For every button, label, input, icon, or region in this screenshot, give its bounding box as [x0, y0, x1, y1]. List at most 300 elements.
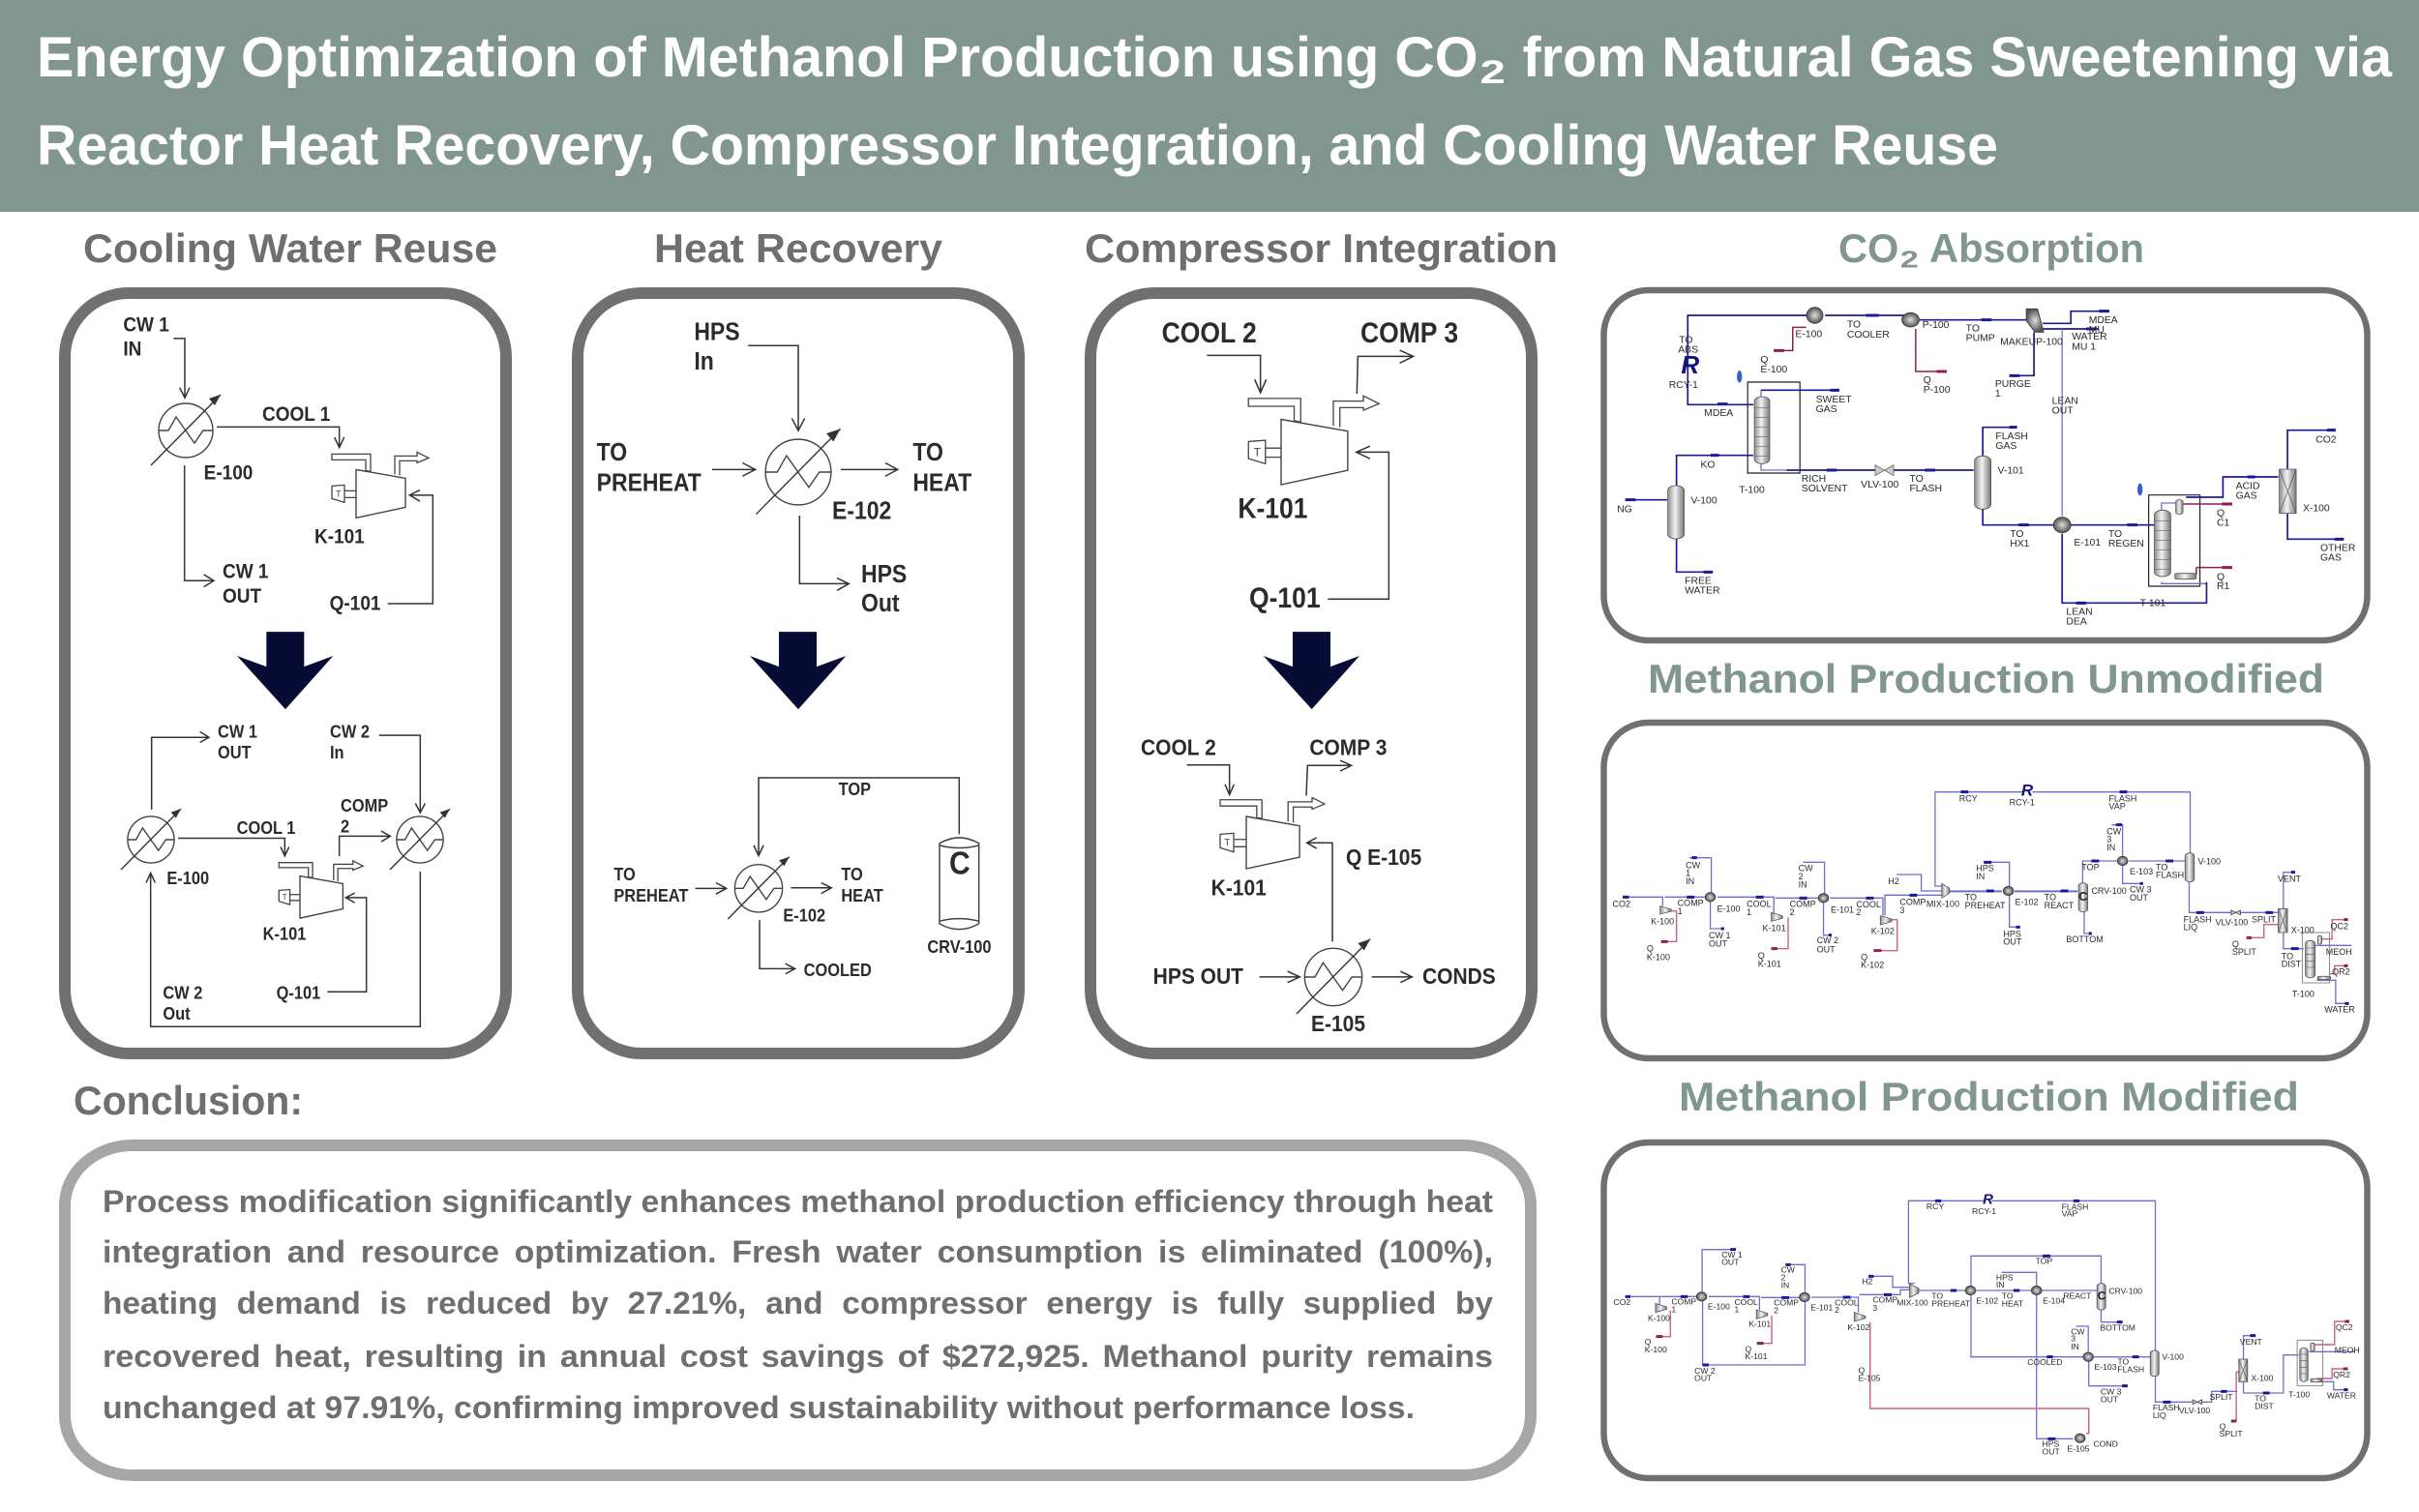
labels: unmodified flowsheet: VLV-100: [2215, 918, 2248, 928]
labels: CO2 absorption: C1: [2217, 518, 2230, 528]
labels: unmodified flowsheet: V-100: [2197, 856, 2221, 866]
labels: heat recovery: [597, 318, 992, 980]
labels: unmodified flowsheet: TOP: [2081, 862, 2100, 872]
labels: unmodified flowsheet: K-102: [1871, 927, 1895, 936]
labels: unmodified flowsheet: Q: [2232, 939, 2239, 949]
labels: CO2 absorption: HX1: [2010, 539, 2030, 549]
labels: cooling water reuse: K-101: [263, 923, 307, 943]
labels: modified flowsheet: TO: [1931, 1291, 1943, 1301]
icon: heat exchanger E-101 modified: [390, 809, 450, 870]
labels: CO2 absorption: Q: [1760, 355, 1769, 366]
labels: unmodified flowsheet: BOTTOM: [2066, 934, 2104, 944]
labels: unmodified flowsheet: COMP: [1678, 899, 1704, 908]
labels: unmodified flowsheet: IN: [1686, 876, 1694, 886]
labels: unmodified flowsheet: OUT: [2130, 893, 2149, 903]
panel: heat recovery: [578, 293, 1019, 1053]
labels: heat recovery: HEAT: [912, 470, 971, 497]
labels: cooling water reuse: Q-101: [277, 983, 321, 1003]
conclusion text: Process modification significantly enhances methanol production efficiency through heat: [103, 1184, 1493, 1219]
labels: CO2 absorption: LEAN: [2052, 397, 2078, 407]
labels: modified flowsheet: FLASH: [2153, 1403, 2180, 1412]
labels: unmodified flowsheet: K-100: [1651, 917, 1674, 927]
labels: unmodified flowsheet: Q: [1758, 951, 1765, 961]
labels: CO2 absorption: P-100: [1924, 385, 1951, 396]
icon: heat exchanger E-102 modified: [728, 857, 790, 919]
labels: unmodified flowsheet: 3: [2106, 835, 2111, 845]
labels: modified flowsheet: 1: [1671, 1305, 1676, 1315]
labels: unmodified flowsheet: E-102: [2015, 898, 2039, 907]
icon: compressor K-101 base: [332, 452, 429, 518]
labels: unmodified flowsheet: 1: [1686, 869, 1690, 878]
labels: heat recovery: PREHEAT: [613, 885, 689, 905]
labels: cooling water reuse: [123, 314, 388, 1023]
labels: unmodified flowsheet: MEOH: [2326, 947, 2352, 957]
labels: unmodified flowsheet: CW 3: [2130, 884, 2152, 894]
header banner: [0, 0, 2419, 212]
panel: CO2 absorption flowsheet: [1604, 290, 2367, 640]
labels: modified flowsheet: 2: [1781, 1272, 1786, 1282]
labels: unmodified flowsheet: IN: [1976, 872, 1985, 881]
labels: modified flowsheet: E-102: [1976, 1296, 1998, 1306]
labels: modified flowsheet: Q: [1645, 1337, 1652, 1347]
labels: modified flowsheet: K-101: [1748, 1319, 1771, 1329]
heading: Cooling Water Reuse: Cooling Water Reuse: [83, 225, 497, 271]
panel: cooling water reuse: [65, 293, 506, 1053]
labels: CO2 absorption: T-100: [1739, 485, 1765, 495]
labels: CO2 absorption: MU: [2089, 325, 2105, 336]
labels: modified flowsheet: MEOH: [2335, 1346, 2360, 1355]
arrow: base to modified: [750, 632, 846, 709]
panel frame: [578, 293, 1019, 1053]
heading: Conclusion: Conclusion:: [74, 1078, 303, 1123]
labels: modified flowsheet: CW 1: [1721, 1250, 1743, 1260]
title: ₂: [1478, 22, 1508, 96]
icon: compressor K-101 modified: [1220, 798, 1325, 869]
labels: unmodified flowsheet: 2: [1799, 872, 1804, 881]
labels: CO2 absorption: P-100: [1923, 320, 1950, 331]
labels: unmodified flowsheet: VENT: [2278, 874, 2302, 883]
heading: CO2 Absorption: ₂: [1898, 224, 1920, 277]
labels: modified flowsheet: TO: [2002, 1291, 2014, 1301]
labels: unmodified flowsheet: 1: [1747, 907, 1751, 917]
labels: CO2 absorption: Q: [2217, 572, 2225, 582]
labels: CO2 absorption: Q: [2217, 508, 2225, 519]
labels: unmodified flowsheet: VAP: [2108, 802, 2126, 812]
labels: CO2 absorption: T-101: [2140, 599, 2165, 609]
labels: unmodified flowsheet: 2: [1856, 907, 1861, 917]
labels: unmodified flowsheet: IN: [1799, 880, 1807, 890]
labels: cooling water reuse: Out: [163, 1003, 191, 1023]
icon: compressor K-101 base: T: [336, 489, 342, 498]
conclusion text: heating demand is reduced by 27.21%, and compressor energy is fully supplied by: [103, 1286, 1493, 1320]
labels: heat recovery: C: [949, 845, 971, 881]
labels: CO2 absorption: E-100: [1795, 329, 1822, 340]
labels: unmodified flowsheet: C: [2078, 889, 2088, 904]
labels: modified flowsheet: QC2: [2336, 1322, 2353, 1332]
labels: unmodified flowsheet: IN: [2106, 843, 2115, 852]
labels: modified flowsheet: K-101: [1746, 1351, 1768, 1361]
labels: CO2 absorption: MDEA: [2089, 315, 2118, 326]
labels: modified flowsheet: Q: [1859, 1365, 1866, 1375]
labels: compressor integration: CONDS: [1422, 964, 1496, 989]
labels: unmodified flowsheet: [1612, 782, 2355, 1015]
labels: unmodified flowsheet: X-100: [2291, 925, 2314, 934]
labels: CO2 absorption: FLASH: [1909, 484, 1942, 494]
labels: CO2 absorption: MU 1: [2072, 342, 2096, 353]
labels: CO2 absorption: GAS: [1816, 404, 1837, 415]
labels: modified flowsheet: CW 2: [1694, 1366, 1716, 1376]
labels: unmodified flowsheet: PREHEAT: [1965, 901, 2006, 910]
labels: unmodified flowsheet: CW: [2106, 826, 2122, 836]
panel frame: [65, 293, 506, 1053]
labels: cooling water reuse: CW 1: [218, 722, 257, 742]
labels: heat recovery: TO: [613, 864, 636, 884]
labels: CO2 absorption: RCY-1: [1669, 380, 1698, 391]
labels: CO2 absorption: DEA: [2066, 617, 2087, 628]
labels: modified flowsheet: RCY-1: [1972, 1206, 1996, 1216]
heading: Methanol Production Unmodified: Methanol Production Unmodified: [1648, 656, 2324, 701]
labels: unmodified flowsheet: REACT: [2045, 901, 2075, 910]
labels: cooling water reuse: COMP: [341, 795, 388, 815]
labels: unmodified flowsheet: COOL: [1856, 900, 1881, 909]
labels: modified flowsheet: IN: [2071, 1342, 2079, 1351]
icon: compressor K-101 modified: [279, 861, 363, 918]
labels: CO2 absorption: TO: [1679, 335, 1693, 345]
labels: compressor integration: E-105: [1311, 1011, 1365, 1036]
labels: CO2 absorption: VLV-100: [1861, 480, 1898, 490]
labels: unmodified flowsheet: OUT: [1709, 939, 1727, 949]
labels: modified flowsheet: COOLED: [2027, 1357, 2063, 1367]
labels: modified flowsheet: COMP: [1774, 1298, 1799, 1308]
labels: cooling water reuse: COOL 1: [262, 403, 330, 426]
labels: compressor integration: Q-101: [1249, 581, 1321, 613]
labels: unmodified flowsheet: RCY: [1959, 793, 1978, 803]
panel frame: [1090, 293, 1532, 1053]
labels: unmodified flowsheet: QC2: [2331, 922, 2348, 932]
labels: cooling water reuse: CW 1: [123, 314, 169, 337]
labels: unmodified flowsheet: 2: [1790, 907, 1795, 917]
labels: heat recovery: TOP: [839, 779, 871, 799]
panel: conclusion: [65, 1145, 1531, 1475]
labels: heat recovery: E-102: [832, 498, 891, 525]
labels: unmodified flowsheet: TO: [2282, 951, 2293, 961]
labels: modified flowsheet: Q: [1746, 1344, 1752, 1353]
labels: modified flowsheet: TOP: [2036, 1257, 2052, 1266]
labels: modified flowsheet: H2: [1862, 1277, 1872, 1287]
conclusion text: unchanged at 97.91%, confirming improved sustainability without performance loss.: [103, 1390, 1415, 1425]
labels: unmodified flowsheet: E-100: [1717, 904, 1740, 913]
labels: CO2 absorption: REGEN: [2108, 539, 2144, 549]
labels: unmodified flowsheet: K-100: [1647, 952, 1670, 962]
labels: modified flowsheet: E-105: [2067, 1444, 2090, 1454]
labels: compressor integration: COOL 2: [1141, 735, 1216, 760]
labels: modified flowsheet: FLASH: [2062, 1201, 2088, 1211]
labels: unmodified flowsheet: E-101: [1831, 904, 1854, 914]
heading: CO2 Absorption: Absorption: [1920, 225, 2144, 271]
labels: CO2 absorption: GAS: [2320, 552, 2342, 563]
title: [37, 22, 2393, 177]
icon: compressor K-101 modified: T: [283, 893, 287, 902]
labels: unmodified flowsheet: SPLIT: [2252, 914, 2277, 924]
labels: CO2 absorption: E-100: [1760, 365, 1787, 375]
labels: unmodified flowsheet: COOL: [1747, 899, 1772, 908]
labels: modified flowsheet: HPS: [1996, 1272, 2014, 1282]
labels: heat recovery: In: [694, 348, 714, 375]
labels: CO2 absorption: RICH: [1802, 474, 1826, 485]
heading: Compressor Integration: Compressor Integration: [1085, 225, 1558, 271]
flowsheet drawing: [1626, 1201, 2355, 1442]
labels: modified flowsheet: E-101: [1810, 1302, 1833, 1312]
panel: methanol production unmodified flowsheet: [1604, 723, 2367, 1058]
labels: CO2 absorption: COOLER: [1847, 330, 1890, 341]
labels: modified flowsheet: CRV-100: [2108, 1286, 2142, 1295]
labels: CO2 absorption: MDEA: [1704, 408, 1733, 419]
labels: heat recovery: TO: [912, 439, 943, 466]
labels: modified flowsheet: CW: [2071, 1326, 2085, 1336]
labels: unmodified flowsheet: QR2: [2332, 967, 2350, 977]
labels: CO2 absorption: V-100: [1690, 496, 1717, 507]
labels: CO2 absorption: X-100: [2303, 504, 2330, 515]
labels: modified flowsheet: Q: [2220, 1421, 2226, 1431]
labels: unmodified flowsheet: RCY-1: [2010, 798, 2035, 808]
labels: unmodified flowsheet: HPS: [1976, 864, 1994, 874]
labels: modified flowsheet: K-100: [1648, 1313, 1670, 1322]
labels: unmodified flowsheet: COMP: [1899, 898, 1926, 907]
labels: unmodified flowsheet: FLASH: [2184, 914, 2212, 924]
labels: modified flowsheet: COOL: [1835, 1297, 1859, 1307]
labels: unmodified flowsheet: CW 2: [1817, 935, 1838, 945]
panel frame: [1604, 1142, 2367, 1478]
labels: CO2 absorption: TO: [2108, 529, 2122, 540]
labels: modified flowsheet: SPLIT: [2210, 1392, 2233, 1402]
labels: modified flowsheet: OUT: [1721, 1258, 1740, 1267]
flowsheet drawing: [1626, 308, 2344, 603]
panel: methanol production modified flowsheet: [1604, 1142, 2367, 1478]
icon: heat exchanger E-100 modified: [121, 809, 181, 870]
labels: modified flowsheet: BOTTOM: [2100, 1322, 2135, 1332]
conclusion text: integration and resource optimization. Fresh water consumption is eliminated (100%),: [103, 1234, 1493, 1269]
labels: unmodified flowsheet: MIX-100: [1926, 900, 1959, 909]
labels: unmodified flowsheet: COMP: [1790, 899, 1816, 908]
labels: modified flowsheet: SPLIT: [2220, 1429, 2243, 1438]
labels: modified flowsheet: 2: [1835, 1305, 1839, 1315]
labels: modified flowsheet: REACT: [2063, 1291, 2092, 1301]
labels: heat recovery: TO: [841, 864, 863, 884]
labels: unmodified flowsheet: FLASH: [2156, 871, 2184, 880]
icon: compressor K-101 base: [1248, 396, 1379, 485]
labels: heat recovery: PREHEAT: [597, 470, 702, 497]
labels: cooling water reuse: 2: [341, 816, 349, 837]
labels: modified flowsheet: 1: [1734, 1305, 1739, 1315]
heading: CO2 Absorption: CO: [1838, 225, 1899, 271]
icon: heat exchanger E-105: [1297, 939, 1370, 1014]
labels: CO2 absorption: TO: [1847, 319, 1861, 330]
labels: CO2 absorption: ACID: [2236, 482, 2259, 492]
labels: modified flowsheet: 2: [1774, 1306, 1778, 1316]
labels: modified flowsheet: MIX-100: [1896, 1297, 1928, 1307]
labels: unmodified flowsheet: TO: [2156, 862, 2167, 872]
labels: modified flowsheet: OUT: [2043, 1446, 2060, 1456]
labels: modified flowsheet: VAP: [2062, 1209, 2077, 1219]
labels: CO2 absorption: WATER: [2072, 332, 2107, 342]
labels: CO2 absorption: E-101: [2074, 538, 2101, 548]
labels: CO2 absorption: GAS: [1995, 441, 2016, 452]
stream lines and vessel CRV-100: [696, 345, 979, 974]
icon: compressor K-101 base: T: [1254, 445, 1262, 459]
labels: unmodified flowsheet: SPLIT: [2232, 947, 2256, 957]
labels: modified flowsheet: LIQ: [2153, 1410, 2166, 1420]
labels: heat recovery: HPS: [861, 561, 907, 588]
labels: modified flowsheet: COND: [2093, 1439, 2118, 1449]
labels: unmodified flowsheet: CW: [1686, 860, 1701, 870]
labels: modified flowsheet: V-100: [2162, 1352, 2184, 1362]
labels: unmodified flowsheet: CRV-100: [2091, 886, 2127, 896]
stream lines: [1187, 350, 1414, 983]
labels: heat recovery: TO: [597, 439, 627, 466]
labels: unmodified flowsheet: WATER: [2324, 1005, 2355, 1015]
conclusion frame: [65, 1145, 1531, 1475]
labels: cooling water reuse: COOL 1: [237, 817, 296, 838]
title: from Natural Gas Sweetening via: [1508, 26, 2393, 89]
labels: modified flowsheet: IN: [1996, 1280, 2005, 1290]
labels: modified flowsheet: WATER: [2327, 1391, 2356, 1401]
labels: CO2 absorption: WATER: [1685, 586, 1720, 597]
labels: unmodified flowsheet: OUT: [1817, 944, 1836, 954]
labels: CO2 absorption: TO: [2010, 529, 2023, 540]
labels: CO2 absorption: PURGE: [1995, 379, 2031, 390]
labels: modified flowsheet: CW: [1781, 1265, 1796, 1275]
labels: cooling water reuse: CW 2: [330, 722, 370, 742]
heading: Methanol Production Modified: Methanol Production Modified: [1679, 1074, 2299, 1119]
labels: modified flowsheet: RCY: [1926, 1201, 1944, 1211]
labels: unmodified flowsheet: 1: [1678, 906, 1683, 916]
labels: cooling water reuse: E-100: [204, 462, 253, 485]
labels: cooling water reuse: K-101: [314, 526, 365, 548]
panel frame: [1604, 290, 2367, 640]
labels: modified flowsheet: FLASH: [2117, 1365, 2144, 1375]
labels: cooling water reuse: IN: [123, 338, 141, 361]
labels: unmodified flowsheet: CW: [1799, 864, 1813, 874]
labels: modified flowsheet: X-100: [2252, 1373, 2274, 1382]
labels: unmodified flowsheet: TO: [2045, 893, 2056, 903]
labels: CO2 absorption: GAS: [2236, 491, 2257, 502]
labels: compressor integration: K-101: [1238, 492, 1307, 524]
labels: CO2 absorption: PUMP: [1966, 334, 1995, 344]
labels: modified flowsheet: VENT: [2240, 1337, 2263, 1347]
labels: unmodified flowsheet: TO: [1965, 893, 1977, 903]
panel: compressor integration: [1090, 293, 1532, 1053]
labels: modified flowsheet: VLV-100: [2179, 1406, 2210, 1415]
labels: modified flowsheet: E-100: [1708, 1301, 1730, 1311]
labels: unmodified flowsheet: R: [2021, 782, 2034, 800]
labels: modified flowsheet: R: [1983, 1192, 1993, 1208]
labels: cooling water reuse: CW 1: [223, 561, 268, 583]
labels: modified flowsheet: 3: [1872, 1303, 1877, 1313]
labels: heat recovery: E-102: [783, 905, 825, 926]
labels: modified flowsheet: OUT: [2101, 1394, 2119, 1404]
labels: CO2 absorption: R1: [2217, 581, 2230, 592]
labels: CO2 absorption: OUT: [2052, 406, 2074, 417]
labels: unmodified flowsheet: FLASH: [2108, 793, 2136, 803]
labels: cooling water reuse: Q-101: [330, 593, 380, 615]
labels: CO2 absorption: TO: [1966, 324, 1980, 335]
labels: modified flowsheet: E-103: [2095, 1362, 2117, 1372]
labels: cooling water reuse: E-100: [166, 868, 209, 888]
labels: CO2 absorption: FLASH: [1995, 431, 2028, 442]
labels: modified flowsheet: CW 3: [2101, 1387, 2122, 1397]
labels: modified flowsheet: TO: [2255, 1394, 2266, 1404]
labels: unmodified flowsheet: Q: [1647, 943, 1654, 953]
icon: compressor K-101 modified: T: [1224, 838, 1230, 848]
labels: CO2 absorption: Q: [1924, 375, 1931, 386]
icon: heat exchanger E-102 base: [756, 429, 841, 515]
labels: modified flowsheet: E-105: [1859, 1373, 1881, 1382]
labels: modified flowsheet: QR2: [2333, 1370, 2350, 1379]
labels: unmodified flowsheet: K-102: [1861, 961, 1884, 970]
labels: modified flowsheet: T-100: [2288, 1390, 2310, 1400]
labels: modified flowsheet: HPS: [2043, 1439, 2059, 1449]
labels: heat recovery: COOLED: [804, 960, 872, 980]
labels: CO2 absorption: ABS: [1678, 344, 1698, 355]
labels: modified flowsheet: CO2: [1614, 1297, 1630, 1307]
labels: CO2 absorption: KO: [1701, 460, 1716, 470]
labels: heat recovery: HEAT: [841, 885, 883, 905]
labels: compressor integration: COMP 3: [1309, 735, 1387, 760]
labels: cooling water reuse: In: [330, 742, 344, 762]
labels: modified flowsheet: C: [2098, 1289, 2106, 1302]
labels: unmodified flowsheet: DIST: [2282, 960, 2302, 969]
labels: CO2 absorption: OTHER: [2320, 543, 2356, 553]
labels: unmodified flowsheet: 3: [1899, 905, 1904, 915]
flowsheet drawing: [1623, 792, 2351, 1003]
labels: heat recovery: HPS: [694, 318, 740, 346]
labels: CO2 absorption: 1: [1995, 389, 2001, 400]
title: Energy Optimization of Methanol Production using CO: [37, 26, 1490, 89]
labels: CO2 absorption: CO2: [2315, 434, 2337, 445]
labels: CO2 absorption: FREE: [1685, 577, 1712, 587]
labels: unmodified flowsheet: OUT: [2003, 937, 2022, 947]
labels: unmodified flowsheet: HPS: [2003, 929, 2021, 938]
labels: compressor integration: HPS OUT: [1153, 964, 1243, 989]
labels: CO2 absorption: LEAN: [2066, 608, 2093, 618]
labels: CO2 absorption: SWEET: [1816, 395, 1852, 405]
arrow: base to modified: [237, 632, 333, 709]
labels: cooling water reuse: OUT: [218, 742, 252, 762]
labels: CO2 absorption: R: [1681, 350, 1699, 379]
labels: modified flowsheet: K-102: [1847, 1322, 1870, 1332]
labels: unmodified flowsheet: K-101: [1763, 923, 1786, 933]
labels: unmodified flowsheet: T-100: [2292, 989, 2314, 998]
labels: compressor integration: [1141, 317, 1496, 1036]
labels: heat recovery: Out: [861, 590, 900, 617]
labels: modified flowsheet: COMP: [1872, 1295, 1897, 1305]
icon: heat exchanger E-100 base: [151, 395, 221, 465]
labels: modified flowsheet: TO: [2117, 1357, 2129, 1367]
labels: unmodified flowsheet: Q: [1861, 952, 1867, 962]
labels: cooling water reuse: OUT: [223, 585, 262, 608]
labels: modified flowsheet: 3: [2071, 1334, 2076, 1344]
labels: unmodified flowsheet: LIQ: [2184, 923, 2197, 933]
labels: modified flowsheet: K-100: [1645, 1345, 1667, 1354]
labels: unmodified flowsheet: CO2: [1612, 899, 1630, 908]
labels: compressor integration: COOL 2: [1162, 317, 1257, 348]
conclusion text: [103, 1184, 1493, 1425]
labels: compressor integration: Q E-105: [1346, 845, 1421, 870]
labels: compressor integration: K-101: [1211, 875, 1267, 901]
labels: modified flowsheet: E-104: [2043, 1295, 2065, 1305]
labels: CO2 absorption: SOLVENT: [1802, 484, 1848, 494]
labels: CO2 absorption: TO: [1909, 474, 1924, 485]
